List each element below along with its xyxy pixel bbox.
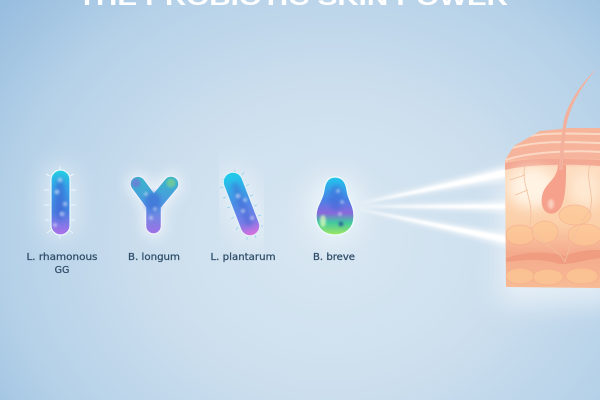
hair shaft [559,68,597,170]
vessels [510,165,591,262]
label: L. plantarum: L. plantarum [210,252,276,263]
label: L. rhamonous GG: L. rhamonous [26,252,98,263]
bacterium: B. breve [309,176,361,240]
label: L. rhamonous GG: GG [55,265,69,276]
bacterium: B. longum [132,178,176,226]
light beams [356,165,506,247]
bacterium: L. plantarum [220,170,263,240]
label: L. rhamonous GG [26,252,98,276]
dermis glow [508,168,556,208]
bacterium: L. rhamnosus GG [44,165,76,239]
fat lobules [506,205,600,285]
label: B. breve: B. breve [313,252,355,263]
epidermis layers [505,134,600,160]
label: B. longum: B. longum [128,252,180,263]
deep layer band [506,250,600,264]
follicle [542,165,566,214]
skin cross-section [500,68,600,305]
